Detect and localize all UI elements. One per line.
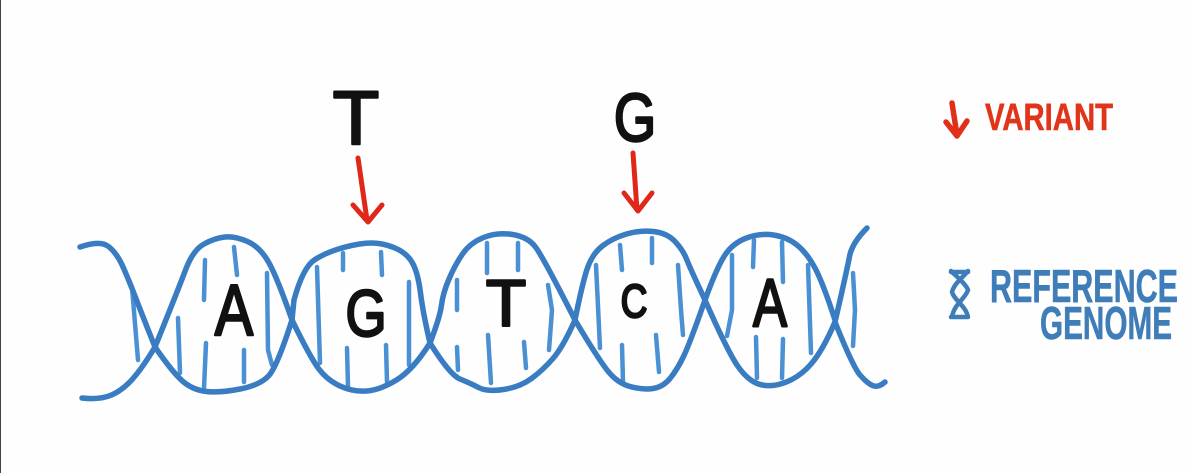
base letter A: A (753, 265, 787, 341)
variant letter G: G (614, 80, 656, 156)
base letter G: G (345, 276, 387, 350)
DNA double helix reference strand (80, 228, 885, 399)
legend: variant (946, 97, 1113, 139)
arrow: variant G to reference C (624, 153, 652, 211)
variant label: VARIANT (985, 97, 1113, 139)
base letter C: C (621, 275, 647, 327)
variant letter T: T (333, 76, 379, 161)
icon: mini helix (951, 271, 968, 317)
arrow: variant T to reference G (353, 158, 382, 222)
base letter T: T (486, 266, 526, 340)
legend: reference genome (951, 260, 1178, 349)
helix rungs (132, 238, 855, 388)
helix strands (80, 228, 885, 399)
icon: red arrow (946, 103, 967, 136)
base letter A: A (215, 270, 254, 350)
